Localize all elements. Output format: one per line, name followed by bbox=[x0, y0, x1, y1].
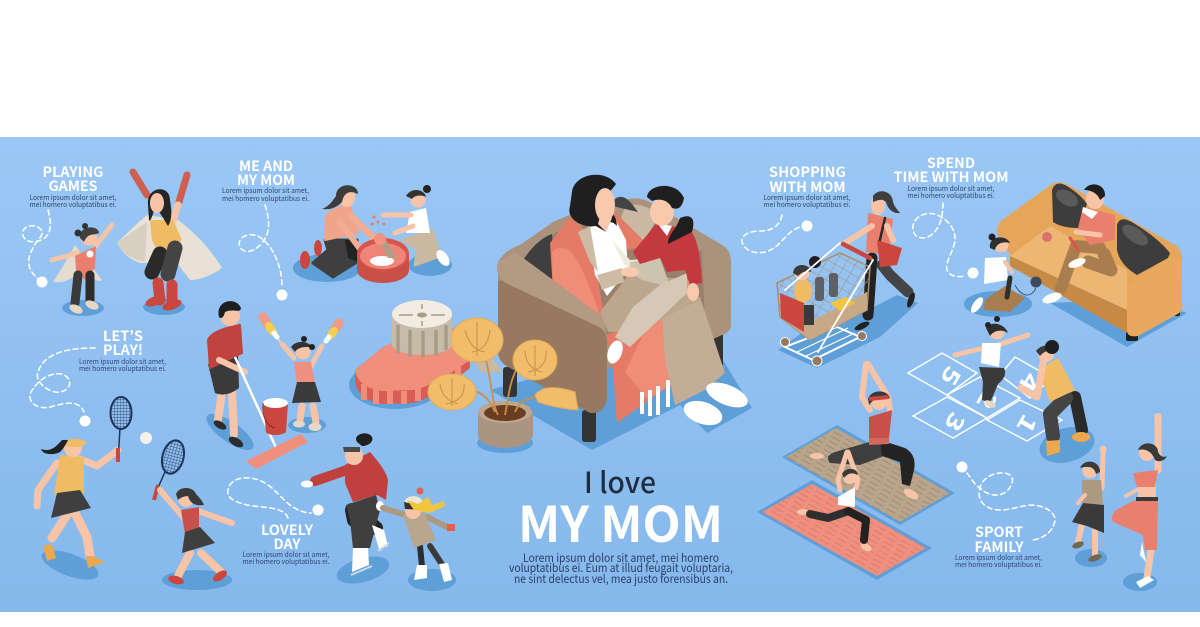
figure: girl with dusters bbox=[263, 317, 339, 433]
hopscotch grid: 5 bbox=[934, 361, 971, 393]
heading: let's play: PLAY! bbox=[103, 340, 143, 360]
figure: child in cape bbox=[52, 223, 112, 316]
hopscotch grid: 2 bbox=[970, 385, 1007, 417]
icon: bucket bbox=[263, 398, 288, 435]
floor pillows bbox=[349, 300, 470, 409]
heading: playing games: PLAYING bbox=[42, 162, 104, 182]
hopscotch grid: 4 bbox=[1012, 367, 1049, 399]
heading: let's play: Lorem ipsum dolor sit amet, bbox=[79, 357, 166, 367]
sofa seat bbox=[1010, 226, 1127, 310]
heading: sport family bbox=[955, 522, 1042, 570]
hopscotch grid bbox=[908, 353, 1062, 441]
heading: playing games bbox=[30, 162, 116, 210]
figure: mother and child washing cat bbox=[293, 185, 452, 283]
title description: ne sint delectus vel, mea justo forensibus an. bbox=[514, 571, 728, 587]
cart tray bbox=[785, 327, 860, 360]
heading: spend time with mom: TIME WITH MOM bbox=[894, 167, 1008, 187]
heading: playing games: Lorem ipsum dolor sit amet, bbox=[30, 193, 116, 203]
hopscotch grid: 3 bbox=[938, 407, 975, 439]
heading: shopping with mom: WITH MOM bbox=[770, 177, 846, 197]
figure: shopping cart with child bbox=[777, 243, 873, 366]
chair back bbox=[498, 198, 731, 380]
title description bbox=[509, 550, 733, 587]
sofa back bbox=[997, 182, 1182, 300]
heading: shopping with mom: mei homero voluptatibus ei. bbox=[764, 200, 850, 210]
figure: skating child bbox=[383, 488, 456, 591]
cart frame bbox=[818, 243, 873, 352]
child bbox=[615, 273, 687, 347]
figure: mother in cape bbox=[117, 172, 222, 315]
heading: sport family: FAMILY bbox=[974, 537, 1024, 557]
hopscotch grid: 1 bbox=[1010, 409, 1047, 441]
heading: lovely day: DAY bbox=[274, 534, 301, 554]
dashed path: me and my mom bbox=[239, 205, 288, 300]
dashed path: spend time bbox=[913, 203, 978, 278]
racket bbox=[110, 397, 132, 462]
heading: lovely day: LOVELY bbox=[261, 520, 314, 540]
person on sofa bbox=[1061, 246, 1100, 288]
sofa arm bbox=[1127, 258, 1182, 336]
figure: shopping mother bbox=[778, 191, 918, 368]
figure: sofa bbox=[997, 182, 1187, 347]
figure: sport child bbox=[1071, 446, 1107, 567]
heading: shopping with mom: Lorem ipsum dolor sit amet, bbox=[764, 193, 850, 203]
dashed path: let's play bbox=[30, 348, 95, 426]
title description: voluptatibus ei. Eum at illud feugait voluptaria, bbox=[509, 560, 733, 576]
heading: lovely day bbox=[242, 520, 330, 567]
figure: sport mother bbox=[1112, 413, 1167, 591]
chair shadow bbox=[490, 355, 752, 450]
figure: armchair with mother and child reading bbox=[490, 175, 752, 450]
heading: me and my mom: Lorem ipsum dolor sit amet, bbox=[222, 186, 309, 196]
yoga mats bbox=[757, 425, 955, 580]
dashed path: playing games bbox=[23, 210, 50, 288]
figure: squatting mother bbox=[1021, 340, 1098, 469]
heading: me and my mom: ME AND bbox=[239, 156, 293, 176]
heading: shopping with mom: SHOPPING bbox=[769, 162, 846, 182]
heading: playing games: mei homero voluptatibus ei. bbox=[30, 200, 116, 210]
blanket bbox=[550, 217, 605, 320]
background panel bbox=[0, 137, 1200, 612]
heading: spend time with mom: mei homero voluptatibus ei. bbox=[908, 191, 994, 201]
heading: me and my mom: mei homero voluptatibus ei. bbox=[222, 194, 309, 204]
heading: let's play: mei homero voluptatibus ei. bbox=[79, 364, 166, 374]
figure: potted plant bbox=[428, 318, 578, 453]
book bbox=[612, 240, 670, 287]
title line: MY MOM: MY MOM bbox=[518, 486, 723, 557]
heading: lovely day: mei homero voluptatibus ei. bbox=[242, 557, 330, 567]
heading: sport family: SPORT bbox=[975, 522, 1023, 542]
heading: sport family: mei homero voluptatibus ei. bbox=[955, 560, 1042, 570]
pillow bbox=[518, 234, 556, 292]
figure: mother mopping bbox=[201, 301, 308, 469]
mother bbox=[588, 213, 628, 296]
main title bbox=[509, 460, 733, 587]
figure: hopping child bbox=[955, 316, 1028, 409]
chair arm bbox=[498, 281, 607, 413]
bottles bbox=[815, 273, 838, 301]
heading: let's play: LET’S bbox=[103, 326, 143, 346]
heading: spend time with mom: Lorem ipsum dolor sit amet, bbox=[908, 184, 994, 194]
sofa front bbox=[1010, 256, 1127, 333]
heading: lovely day: Lorem ipsum dolor sit amet, bbox=[242, 550, 330, 560]
fringe bbox=[642, 380, 668, 416]
figure: tennis mother bbox=[37, 397, 152, 586]
back cushion bbox=[612, 205, 660, 242]
title line: I love: I love bbox=[584, 460, 656, 502]
heading: shopping with mom bbox=[764, 162, 850, 210]
heading: let's play bbox=[79, 326, 166, 374]
heading: spend time with mom: SPEND bbox=[927, 153, 975, 173]
heading: me and my mom: MY MOM bbox=[237, 170, 295, 190]
tennis ball bbox=[140, 432, 152, 444]
cushions bbox=[1052, 183, 1087, 228]
figure: skating mother bbox=[301, 433, 392, 589]
figure: child with yarn bbox=[964, 234, 1042, 317]
dashed path: sport family bbox=[956, 462, 1055, 540]
dashed path: lovely day bbox=[228, 478, 324, 518]
figure: tennis girl bbox=[154, 438, 232, 590]
heading: sport family: Lorem ipsum dolor sit amet, bbox=[955, 553, 1042, 563]
wheels bbox=[780, 332, 866, 366]
child in cart bbox=[794, 279, 812, 303]
title description: Lorem ipsum dolor sit amet, mei homero bbox=[523, 550, 719, 566]
figure: yoga mother bbox=[810, 364, 920, 501]
basket bbox=[777, 253, 870, 340]
dashed path: shopping bbox=[742, 215, 812, 253]
heading: playing games: GAMES bbox=[48, 176, 98, 196]
heading: me and my mom bbox=[222, 156, 309, 204]
heading: spend time with mom bbox=[894, 153, 1008, 201]
figure: yoga child bbox=[797, 452, 873, 553]
